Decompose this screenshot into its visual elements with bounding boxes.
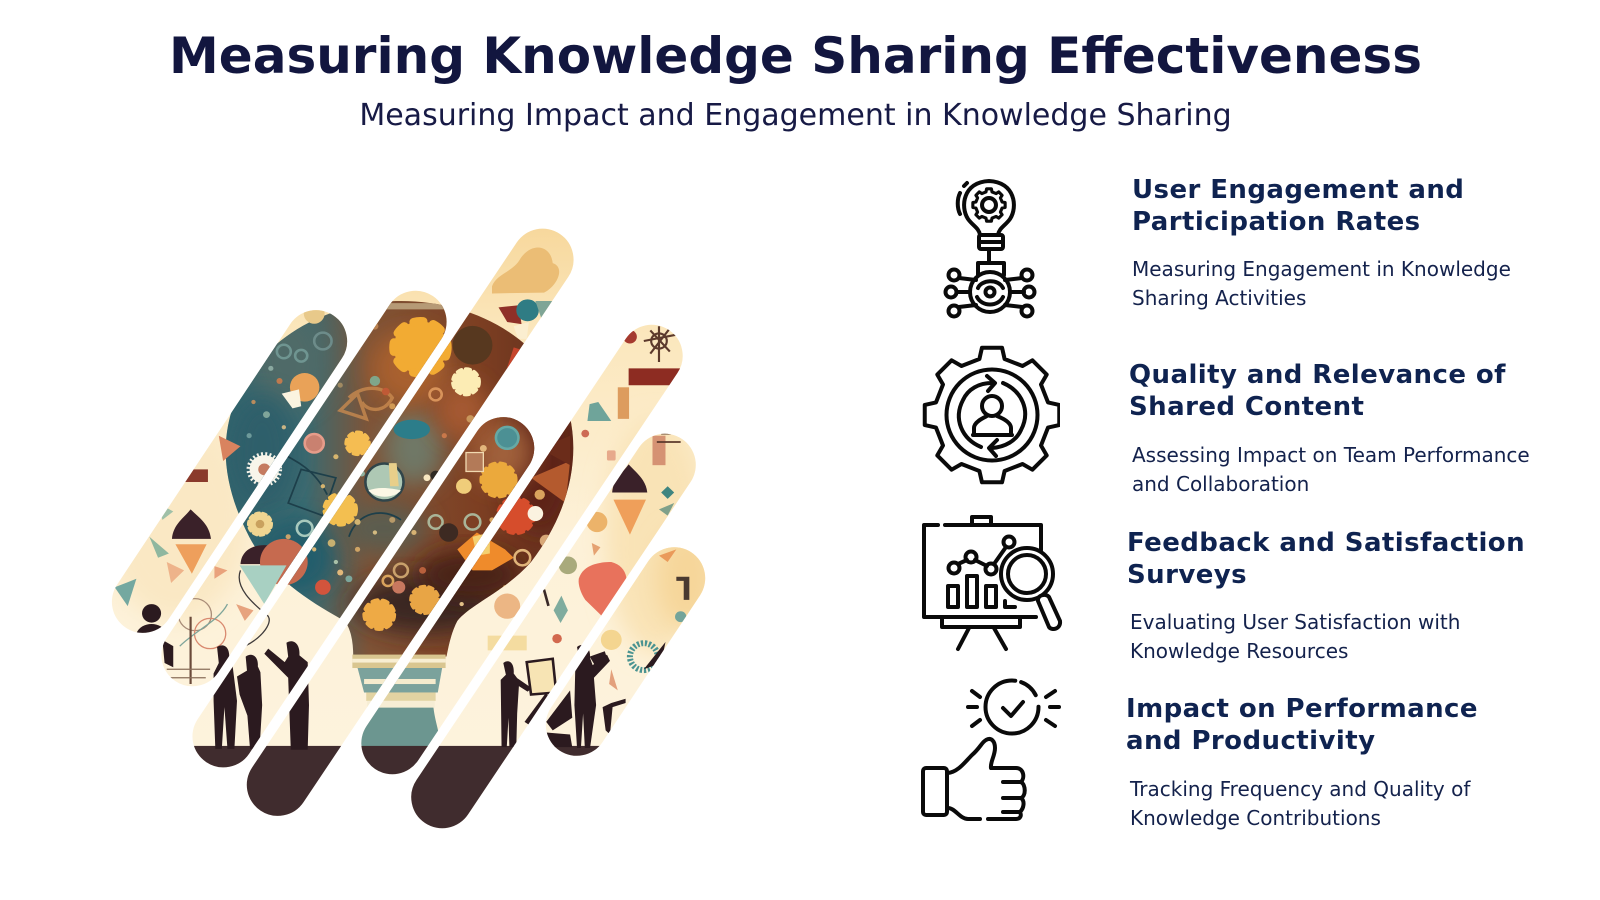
icon: presentation board with magnifier bbox=[922, 515, 1062, 652]
scattered dots bbox=[247, 323, 570, 606]
item: impact on performance bbox=[921, 678, 1478, 830]
heading: impact: and Productivity bbox=[1126, 726, 1375, 756]
title: Measuring Knowledge Sharing Effectiveness bbox=[169, 27, 1422, 85]
teal and rust rings bbox=[277, 333, 530, 586]
heading: quality: Quality and Relevance of bbox=[1129, 360, 1506, 390]
heading: feedback: Feedback and Satisfaction bbox=[1127, 528, 1525, 558]
heading: user engagement: Participation Rates bbox=[1132, 207, 1421, 237]
description: impact bbox=[1130, 776, 1471, 830]
orange circle and highlight bbox=[290, 373, 319, 402]
cream flower bbox=[453, 369, 479, 394]
description: feedback: Evaluating User Satisfaction with bbox=[1130, 610, 1460, 634]
heading: user engagement bbox=[1132, 175, 1464, 237]
background wash bbox=[112, 228, 696, 827]
heading: impact bbox=[1126, 694, 1478, 756]
illustration: light bulb cut into diagonal capsules bbox=[112, 228, 706, 828]
subtitle: Measuring Impact and Engagement in Knowledge Sharing bbox=[359, 98, 1232, 133]
dark disc bbox=[453, 326, 492, 365]
description: user engagement bbox=[1132, 256, 1511, 310]
icon: gear with person bbox=[922, 346, 1060, 484]
floor bbox=[194, 746, 600, 828]
easel board bbox=[527, 659, 556, 695]
bulb top rim bbox=[386, 303, 444, 310]
yellow flowers bbox=[346, 432, 369, 454]
description: feedback: Knowledge Resources bbox=[1130, 639, 1348, 663]
item: feedback and satisfaction bbox=[922, 515, 1525, 663]
white gear bbox=[250, 455, 279, 484]
description: user engagement: Sharing Activities bbox=[1132, 286, 1306, 310]
heading: impact: Impact on Performance bbox=[1126, 694, 1478, 724]
sketch lines in second capsule bbox=[167, 570, 269, 684]
item: quality and relevance bbox=[922, 346, 1530, 496]
heading: user engagement: User Engagement and bbox=[1132, 175, 1464, 205]
heading: feedback: Surveys bbox=[1127, 560, 1247, 590]
description: impact: Knowledge Contributions bbox=[1130, 806, 1381, 830]
description: quality bbox=[1132, 442, 1530, 496]
icon: bulb with gear and network bbox=[944, 179, 1036, 318]
heading: feedback bbox=[1127, 528, 1525, 590]
heading: quality bbox=[1129, 360, 1506, 422]
description: impact: Tracking Frequency and Quality of bbox=[1130, 776, 1470, 800]
red flower and orange blossom bbox=[498, 498, 534, 533]
icon: thumbs up with check bbox=[921, 678, 1061, 821]
bulb glass bbox=[226, 301, 574, 657]
description: user engagement: Measuring Engagement in Knowledge bbox=[1132, 256, 1511, 280]
bulb screw base bbox=[352, 655, 446, 747]
description: feedback bbox=[1130, 610, 1460, 663]
cloud at top bbox=[492, 248, 559, 293]
description: quality: and Collaboration bbox=[1132, 472, 1309, 496]
description: quality: Assessing Impact on Team Performance bbox=[1132, 442, 1530, 466]
light warm wash left and right bbox=[102, 419, 718, 655]
left side lamps and shapes bbox=[115, 304, 325, 621]
teal oval bbox=[394, 420, 430, 439]
floating red and teal shapes bbox=[499, 299, 553, 339]
pale circle with figure bbox=[365, 463, 404, 501]
heading: quality: Shared Content bbox=[1129, 392, 1364, 422]
silhouettes: group of people, presenter, reader bbox=[136, 604, 626, 750]
large yellow flower bbox=[394, 321, 447, 373]
right side decorations bbox=[488, 326, 689, 690]
swirl shapes bbox=[340, 388, 392, 419]
item: user engagement and participation bbox=[944, 175, 1511, 318]
